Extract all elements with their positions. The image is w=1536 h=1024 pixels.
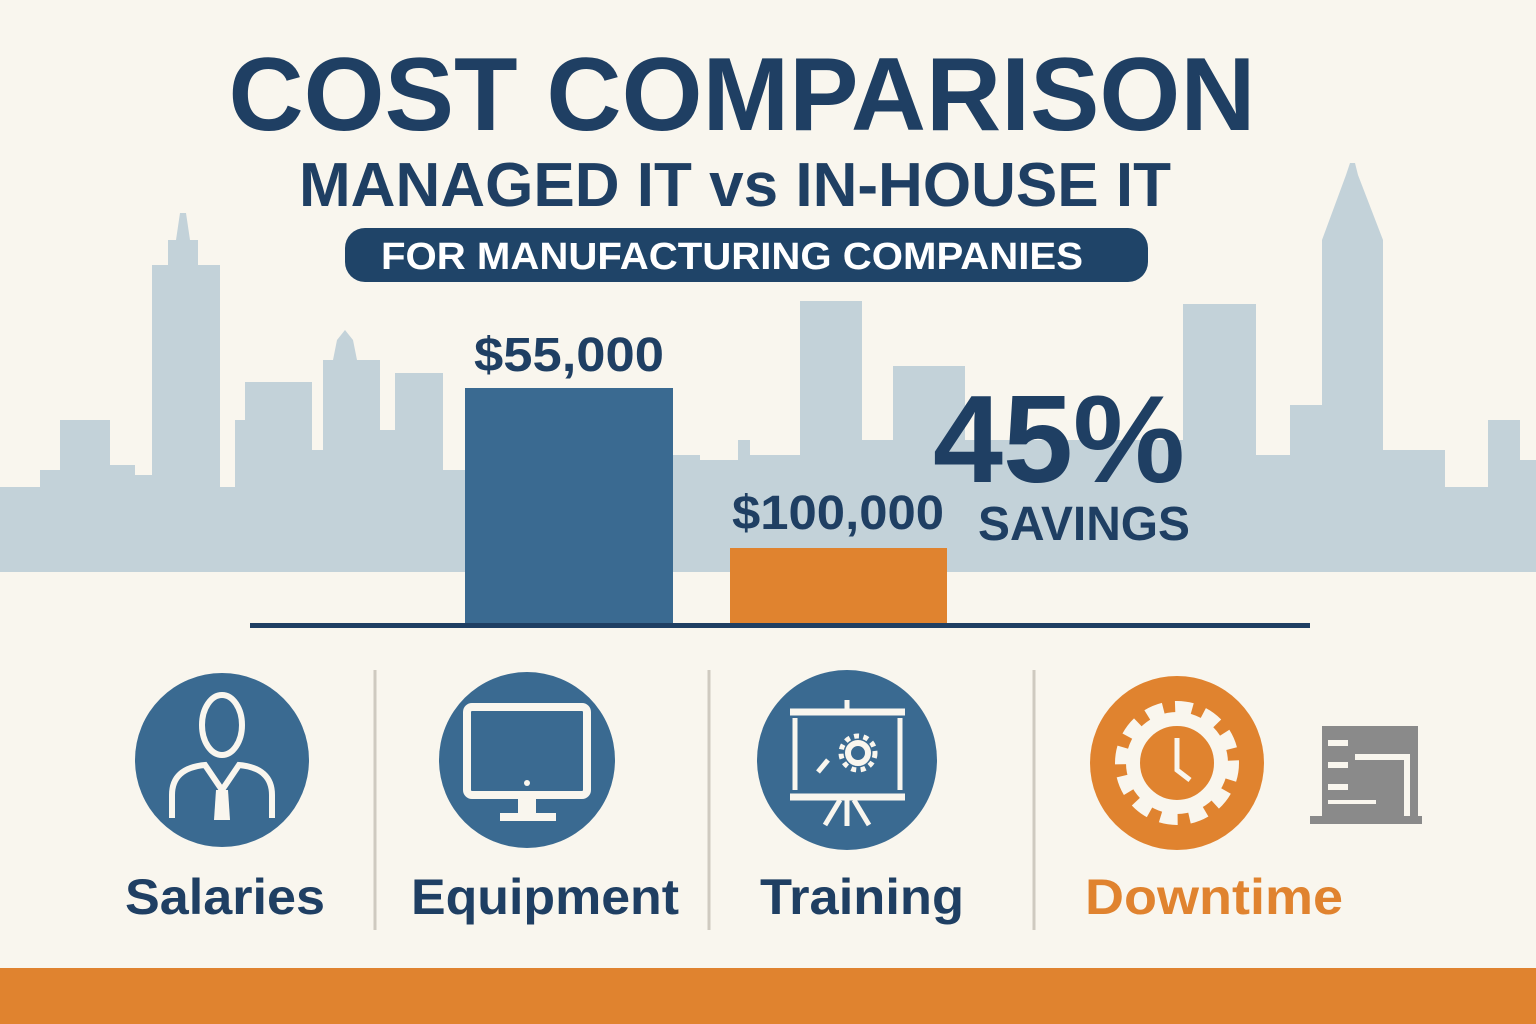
savings callout: SAVINGS — [978, 498, 1190, 551]
icon: equipment monitor — [439, 672, 615, 848]
subtitle: MANAGED IT vs IN-HOUSE IT — [299, 151, 1171, 220]
bar: managed — [465, 388, 673, 625]
bar: in-house — [730, 548, 947, 625]
title: COST COMPARISON — [228, 37, 1256, 153]
label: Training: Training — [760, 869, 964, 925]
label: $55,000: $55,000 — [474, 329, 664, 382]
pill: audience — [345, 228, 1148, 282]
skyline background — [0, 163, 1536, 572]
footer bar — [0, 968, 1536, 1024]
icon: training board — [757, 670, 937, 850]
label: Equipment: Equipment — [411, 869, 679, 925]
savings callout: 45% — [933, 371, 1185, 509]
bar chart — [250, 329, 1310, 628]
label: Salaries: Salaries — [125, 869, 325, 925]
pill: audience: FOR MANUFACTURING COMPANIES — [381, 236, 1083, 278]
icon: building — [1310, 726, 1422, 824]
icon: salaries person — [135, 673, 309, 847]
label: Downtime: Downtime — [1085, 869, 1343, 925]
label: $100,000: $100,000 — [732, 487, 944, 540]
icon: downtime gear clock — [1090, 676, 1264, 850]
